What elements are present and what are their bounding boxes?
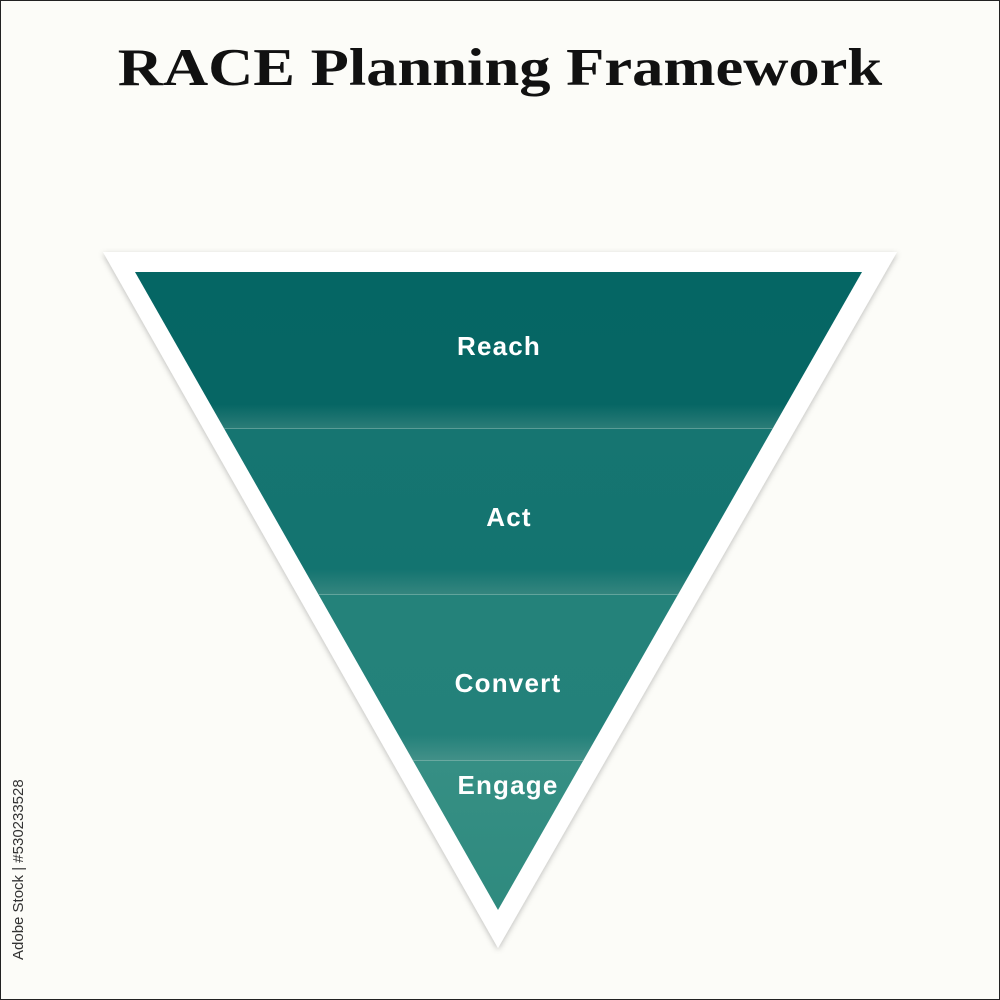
title: RACE Planning Framework (118, 39, 882, 97)
labels: Convert (455, 668, 561, 698)
labels: Act (486, 502, 532, 532)
band: reach (100, 272, 900, 428)
white outer triangle (103, 252, 897, 948)
labels: Engage (457, 770, 559, 800)
band: convert (318, 594, 678, 760)
teal bands (135, 272, 862, 910)
labels: Reach (457, 331, 541, 361)
band: act (224, 428, 773, 594)
watermark id: Adobe Stock | #530233528 (10, 779, 27, 960)
band: engage (412, 760, 584, 910)
funnel diagram (102, 251, 898, 950)
labels (455, 331, 561, 800)
